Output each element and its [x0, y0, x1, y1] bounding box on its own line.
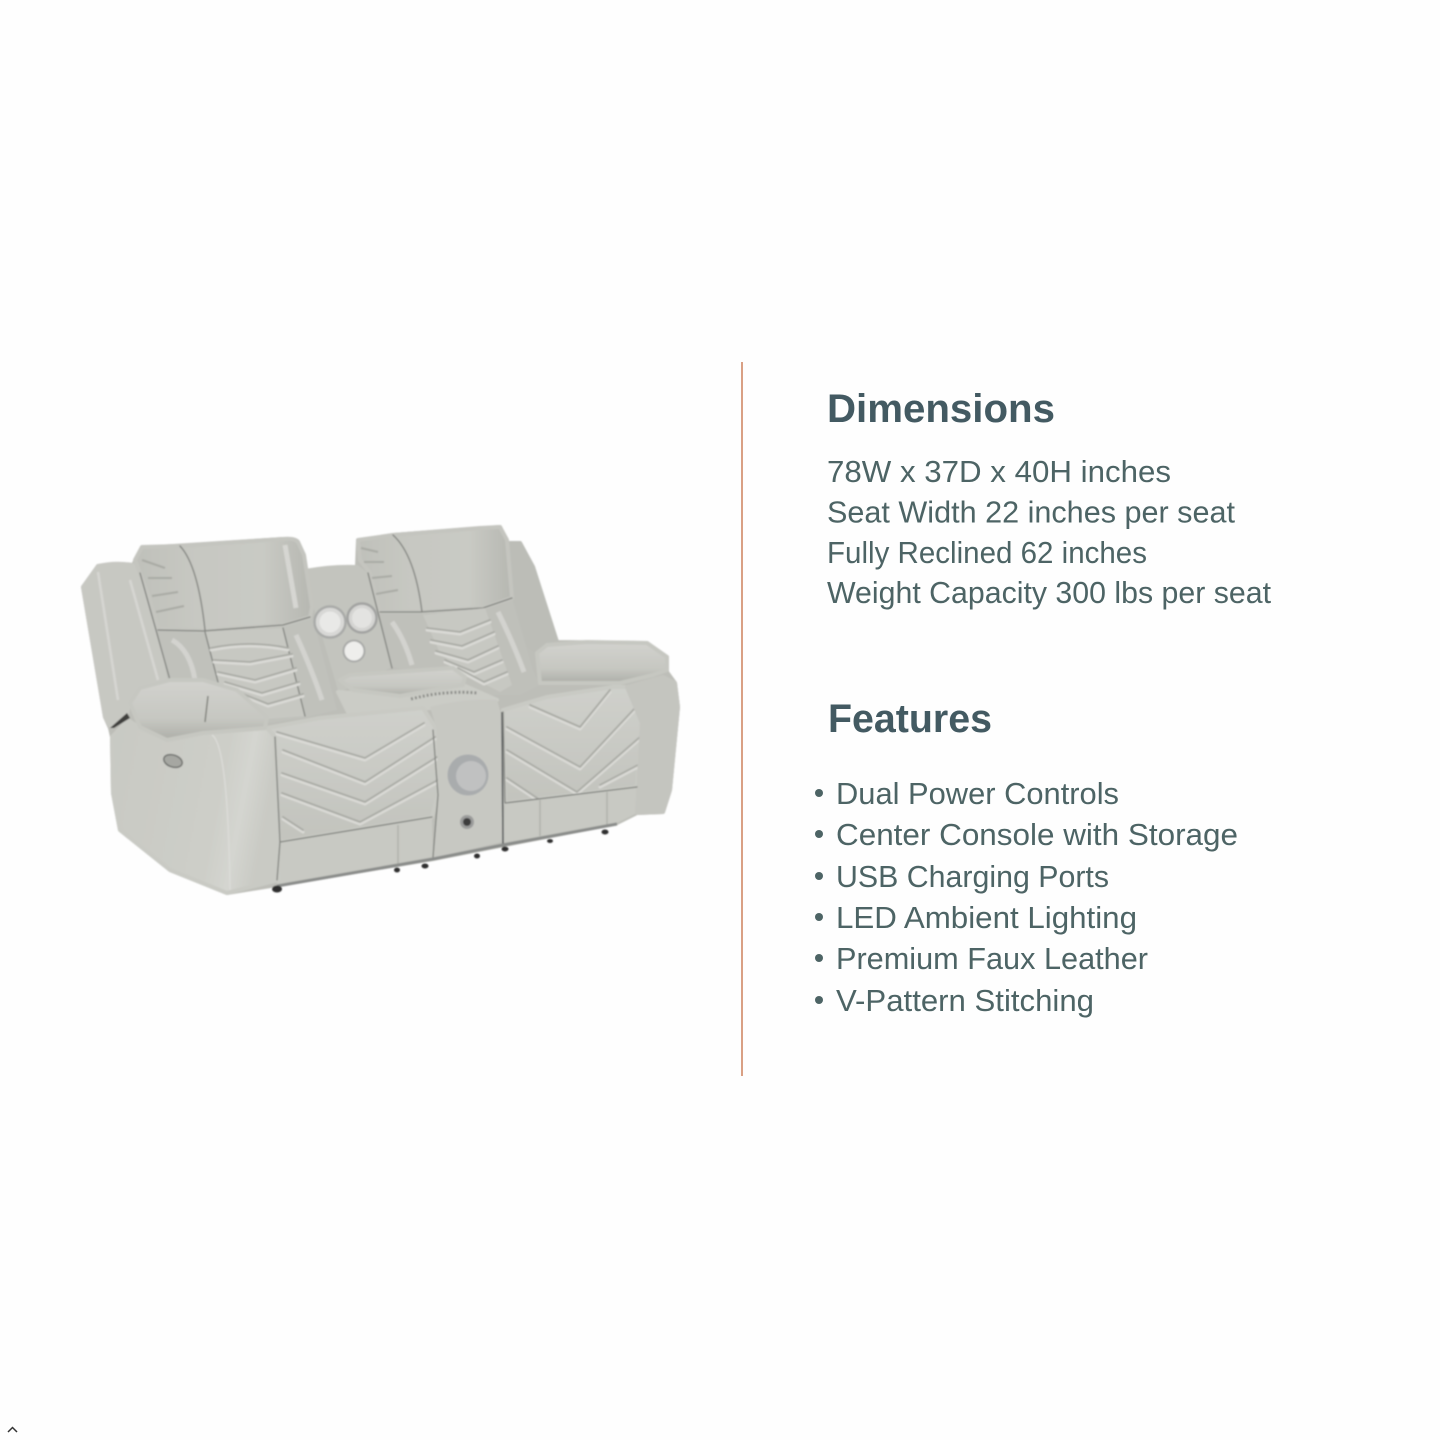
dimensions list: Seat Width 22 inches per seat — [827, 494, 1235, 530]
left lower backrest — [158, 615, 337, 723]
right headrest seam — [368, 535, 512, 668]
right lower backrest — [378, 598, 540, 695]
panel: features — [815, 697, 1238, 1018]
recliner feet — [272, 830, 608, 892]
features bullet list: USB Charging Ports — [836, 859, 1109, 894]
seat edge seams — [275, 712, 637, 880]
features bullet list: Premium Faux Leather — [836, 941, 1148, 976]
power control button — [162, 752, 184, 770]
left panel seam — [397, 825, 399, 866]
left outer back wing — [83, 564, 168, 726]
dimensions list: Fully Reclined 62 inches — [827, 535, 1147, 570]
left arm front — [112, 720, 278, 893]
center console front — [430, 700, 503, 858]
right outer back wing — [507, 543, 557, 652]
console speaker grille — [411, 692, 478, 699]
icon: small caret mark — [8, 1428, 17, 1432]
sofa silhouette underlay — [83, 527, 678, 893]
dimensions list — [827, 454, 1271, 610]
left headrest wrinkles — [142, 560, 184, 612]
left arm crease — [205, 696, 208, 722]
right arm front — [627, 677, 678, 813]
left seat cushion — [267, 708, 438, 842]
right headrest wrinkles — [361, 548, 398, 594]
left headrest seam — [140, 546, 310, 680]
heading: Features: Features — [828, 697, 992, 741]
right headrest — [358, 527, 512, 612]
left chevron back panel — [205, 628, 305, 719]
left seat front panel — [277, 817, 433, 885]
base rail — [277, 824, 617, 886]
dimensions list: Weight Capacity 300 lbs per seat — [827, 575, 1271, 610]
product image: reclining loveseat — [83, 527, 678, 893]
console lid — [340, 668, 465, 696]
right armrest — [537, 642, 667, 683]
features bullet list: V-Pattern Stitching — [836, 983, 1094, 1018]
center console backrest — [305, 567, 392, 690]
left armrest — [130, 680, 267, 740]
usb port — [460, 815, 474, 829]
panel: dimensions — [827, 387, 1271, 610]
speaker — [448, 754, 488, 796]
features bullet list — [815, 776, 1238, 1018]
features bullet list: Center Console with Storage — [836, 817, 1238, 852]
dimensions list: 78W x 37D x 40H inches — [827, 454, 1171, 489]
center console cup rings — [314, 604, 376, 662]
right seat cushion — [503, 687, 642, 803]
right backrest bolster highlights — [392, 612, 524, 672]
left headrest highlight — [285, 545, 296, 608]
right seat front panel — [503, 787, 637, 843]
left wing highlight — [98, 572, 158, 700]
dark gap under left wing — [110, 713, 130, 728]
features bullet list: LED Ambient Lighting — [836, 900, 1137, 935]
console base — [338, 685, 497, 716]
right chevron back panel — [423, 608, 512, 692]
left arm seam — [212, 735, 230, 890]
vertical divider — [741, 362, 743, 1076]
right panel seams — [540, 792, 607, 836]
left headrest — [135, 539, 312, 631]
left backrest bolster highlights — [172, 635, 322, 700]
features bullet list: Dual Power Controls — [836, 776, 1119, 811]
heading: Dimensions: Dimensions — [827, 387, 1055, 431]
